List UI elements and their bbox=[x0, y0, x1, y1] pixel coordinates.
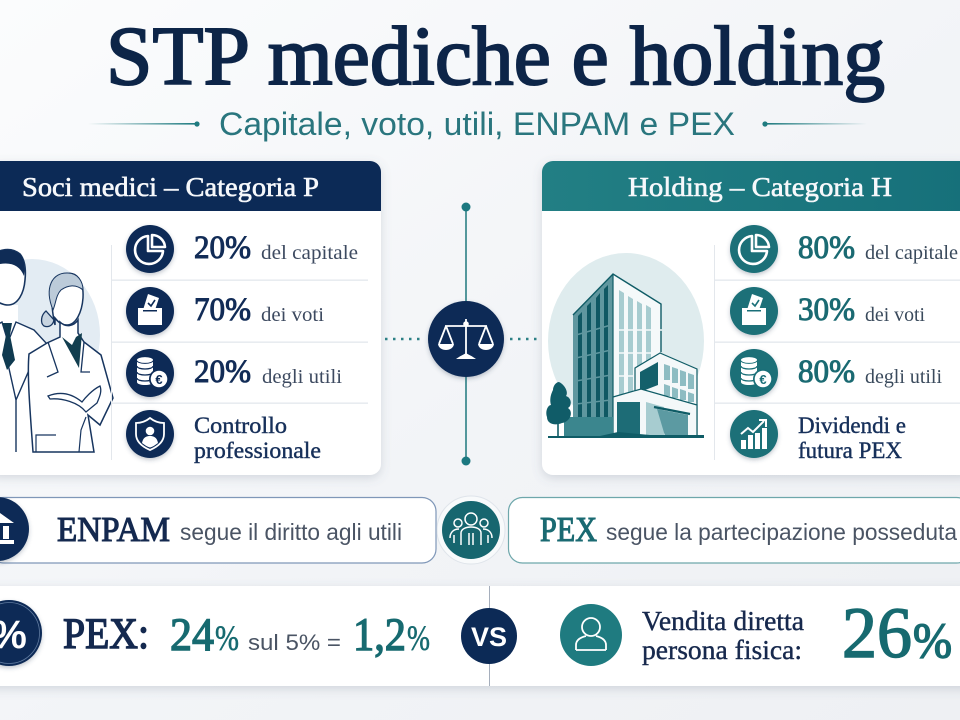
stat: 20% del capitale: del capitale bbox=[261, 242, 358, 264]
icon: coins and euro bbox=[126, 349, 174, 397]
pex calculation: PEX: bbox=[63, 611, 149, 658]
pex calculation: % bbox=[215, 618, 239, 658]
text: dividendi e futura pex: futura PEX bbox=[798, 438, 902, 463]
stat: 26%: 26 bbox=[842, 593, 912, 673]
stat: 20% del capitale: 20% bbox=[194, 230, 251, 266]
stat: 80% degli utili: 80% bbox=[798, 354, 855, 390]
banner: pex bbox=[508, 498, 960, 563]
text: vendita diretta: Vendita diretta bbox=[642, 606, 804, 636]
stat: 20% degli utili: degli utili bbox=[262, 366, 342, 388]
label: enpam: ENPAM bbox=[57, 510, 170, 549]
icon: people bbox=[437, 496, 505, 564]
panel header: holding bbox=[542, 161, 960, 211]
stat: 30% dei voti: 30% bbox=[798, 292, 855, 328]
stat: 70% dei voti bbox=[194, 292, 324, 328]
illustration: doctors bbox=[0, 250, 113, 452]
text: controllo professionale: professionale bbox=[194, 438, 321, 463]
banner: pex: segue la partecipazione posseduta bbox=[606, 519, 957, 545]
stat: 30% dei voti bbox=[798, 292, 925, 328]
stat: 70% dei voti: dei voti bbox=[261, 304, 324, 326]
pex calculation: 1,2 bbox=[353, 609, 406, 661]
banner: enpam bbox=[0, 497, 436, 563]
divider: holding rows bbox=[714, 245, 960, 460]
stat: 80% del capitale bbox=[798, 230, 958, 266]
subtitle with rules bbox=[88, 106, 867, 142]
icon: person bbox=[560, 604, 622, 666]
stat: 26%: % bbox=[913, 612, 952, 668]
icon: pie chart bbox=[730, 225, 778, 273]
pex calculation: % bbox=[407, 618, 430, 658]
icon: pie chart bbox=[126, 225, 174, 273]
icon: coins and euro: € bbox=[155, 372, 163, 387]
stat: 80% degli utili: degli utili bbox=[865, 366, 942, 388]
band: tax comparison bbox=[0, 586, 960, 686]
icon: shield with person bbox=[126, 410, 174, 458]
stat: 80% del capitale: del capitale bbox=[865, 242, 958, 264]
icon: scales bbox=[428, 301, 504, 377]
panel header: soci medici bbox=[0, 161, 381, 211]
icon: ballot box bbox=[126, 287, 174, 335]
text: controllo professionale: Controllo bbox=[194, 413, 287, 438]
text: vendita diretta: persona fisica: bbox=[642, 635, 802, 665]
stat: 70% dei voti: 70% bbox=[194, 292, 251, 328]
stat: 20% degli utili: 20% bbox=[194, 354, 251, 390]
stat: 80% degli utili bbox=[798, 354, 942, 390]
badge: vs bbox=[461, 608, 517, 664]
stat: 80% del capitale: 80% bbox=[798, 230, 855, 266]
center connector bbox=[385, 202, 540, 466]
illustration: building bbox=[546, 253, 704, 438]
divider: soci medici rows bbox=[111, 245, 368, 460]
badge: vs: VS bbox=[471, 622, 507, 652]
heading: soci medici: Soci medici – Categoria P bbox=[22, 172, 319, 202]
heading: holding: Holding – Categoria H bbox=[628, 172, 892, 202]
stat: 20% del capitale bbox=[194, 230, 358, 266]
label: enpam bbox=[57, 510, 402, 549]
pex calculation bbox=[63, 609, 430, 661]
panel: soci medici bbox=[0, 161, 381, 475]
icon: ballot box bbox=[730, 287, 778, 335]
subtitle with rules: Capitale, voto, utili, ENPAM e PEX bbox=[219, 106, 735, 142]
text: dividendi e futura pex: Dividendi e bbox=[798, 413, 906, 438]
icon: percent bbox=[0, 600, 42, 666]
label: enpam: segue il diritto agli utili bbox=[180, 519, 402, 545]
stat: 20% degli utili bbox=[194, 354, 342, 390]
icon: coins and euro bbox=[730, 349, 778, 397]
icon: institution bbox=[0, 497, 29, 561]
pex calculation: sul 5% = bbox=[248, 630, 341, 655]
banner: pex: PEX bbox=[540, 510, 597, 549]
pex calculation: 24 bbox=[170, 609, 214, 661]
panel: holding bbox=[542, 161, 960, 475]
icon: coins and euro: € bbox=[759, 372, 767, 387]
title: STP mediche e holding bbox=[106, 10, 885, 103]
stat: 30% dei voti: dei voti bbox=[865, 304, 925, 326]
icon: growth chart bbox=[730, 410, 778, 458]
